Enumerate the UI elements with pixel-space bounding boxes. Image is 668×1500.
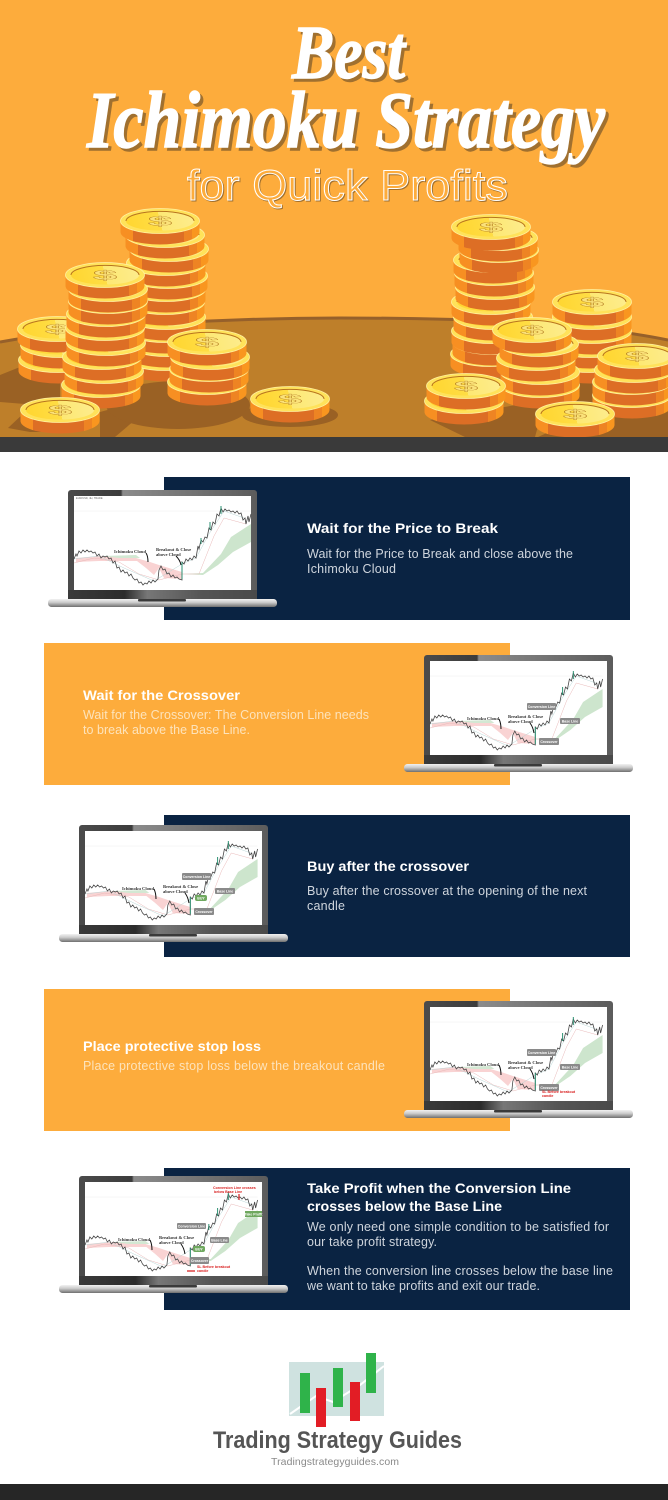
laptop 2: Ichimoku Cloud: [467, 716, 499, 721]
title: Best: [291, 11, 407, 95]
laptop 5: Crossover: [191, 1259, 209, 1263]
laptop 4: [404, 1001, 633, 1118]
laptop 4: SL Before breakout: [542, 1090, 576, 1094]
laptop 5: candle: [197, 1269, 208, 1273]
laptop 4: candle: [542, 1094, 553, 1098]
laptop 5: Breakout & Close: [159, 1235, 194, 1240]
step 5 heading: crosses below the Base Line: [307, 1198, 502, 1214]
laptop 3: above Cloud: [163, 889, 188, 894]
step 2 text: [83, 708, 369, 737]
laptop 5: SL Before breakout: [197, 1265, 231, 1269]
laptop 1: Breakout & Close: [156, 547, 191, 552]
panel 1: [48, 477, 630, 620]
laptop 1: Ichimoku Cloud: [114, 549, 146, 554]
laptop 4: Crossover: [540, 1086, 558, 1090]
title: [86, 11, 605, 165]
step 5 text: we want to take profits and exit our trade.: [306, 1279, 540, 1293]
laptop 1: above Cloud: [156, 552, 181, 557]
laptop 2: Conversion Line: [528, 705, 555, 709]
laptop 5: below Base Line: [214, 1190, 242, 1194]
footer bar: [0, 1484, 668, 1500]
step 4 heading: Place protective stop loss: [83, 1038, 261, 1054]
coin stacks right: [424, 214, 668, 438]
step 2 text: to break above the Base Line.: [83, 723, 250, 737]
header background: [0, 0, 668, 437]
logo url: Tradingstrategyguides.com: [271, 1456, 399, 1468]
step 5 heading: Take Profit when the Conversion Line: [307, 1180, 571, 1196]
step 5 text: [306, 1220, 613, 1293]
laptop 1: EUR/USD, 4H, TRADE: [76, 496, 103, 500]
laptop 3: BUY: [197, 896, 205, 900]
laptop 2: [404, 655, 633, 772]
laptop 4: Base Line: [562, 1066, 578, 1070]
step 5 heading: [307, 1180, 571, 1214]
step 1 text: Ichimoku Cloud: [307, 562, 396, 576]
laptop 5: Take Profit: [245, 1212, 263, 1216]
laptop 5: BUY: [195, 1248, 203, 1252]
logo name: Trading Strategy Guides: [213, 1427, 462, 1454]
panel 5: [59, 1168, 630, 1310]
laptop 2: Crossover: [540, 740, 558, 744]
laptop 4: above Cloud: [508, 1065, 533, 1070]
laptop 5: Base Line: [211, 1238, 228, 1242]
laptop 5: Ichimoku Cloud: [118, 1237, 150, 1242]
laptop 5: Conversion Line: [178, 1224, 205, 1228]
step 1 heading: Wait for the Price to Break: [307, 520, 498, 536]
dark band under header: [0, 437, 668, 452]
laptop 4: Ichimoku Cloud: [467, 1062, 499, 1067]
laptop 3: Conversion Line: [183, 875, 210, 879]
laptop 2: above Cloud: [508, 719, 533, 724]
panel 3: [59, 815, 630, 957]
laptop 4: Conversion Line: [528, 1051, 555, 1055]
laptop 5: Conversion Line crosses: [213, 1186, 256, 1190]
coin shadows: [0, 367, 668, 437]
laptop 3: Ichimoku Cloud: [122, 886, 154, 891]
logo: [213, 1353, 462, 1468]
panel 2: [44, 643, 633, 785]
laptop 2: Base Line: [562, 720, 578, 724]
step 3 text: candle: [307, 899, 345, 913]
laptop 5: above Cloud: [159, 1240, 184, 1245]
step 1 text: Wait for the Price to Break and close above the: [307, 547, 573, 561]
laptop 3: Crossover: [195, 910, 213, 914]
panel 4: [44, 989, 633, 1131]
step 3 text: [307, 884, 588, 913]
laptop 2: Breakout & Close: [508, 714, 543, 719]
laptop 3: [59, 825, 288, 942]
step 5 text: When the conversion line crosses below the base line: [307, 1264, 613, 1278]
step 5 text: We only need one simple condition to be satisfied for: [307, 1220, 609, 1234]
coin stacks left: [18, 208, 330, 434]
laptop 5: [59, 1176, 288, 1293]
laptop 1: [48, 490, 277, 607]
ground: [0, 318, 668, 437]
subtitle: for Quick Profits: [187, 162, 508, 210]
laptop 3: Base Line: [217, 890, 233, 894]
step 3 text: Buy after the crossover at the opening of the next: [307, 884, 588, 898]
step 2 text: Wait for the Crossover: The Conversion Line needs: [83, 708, 369, 722]
step 5 text: our take profit strategy.: [307, 1235, 437, 1249]
laptop 3: Breakout & Close: [163, 884, 198, 889]
step 3 heading: Buy after the crossover: [307, 858, 470, 874]
step 2 heading: Wait for the Crossover: [83, 687, 241, 703]
logo icon: [289, 1353, 384, 1427]
step 4 text: Place protective stop loss below the breakout candle: [83, 1059, 385, 1073]
step 1 text: [307, 547, 573, 576]
laptop 4: Breakout & Close: [508, 1060, 543, 1065]
